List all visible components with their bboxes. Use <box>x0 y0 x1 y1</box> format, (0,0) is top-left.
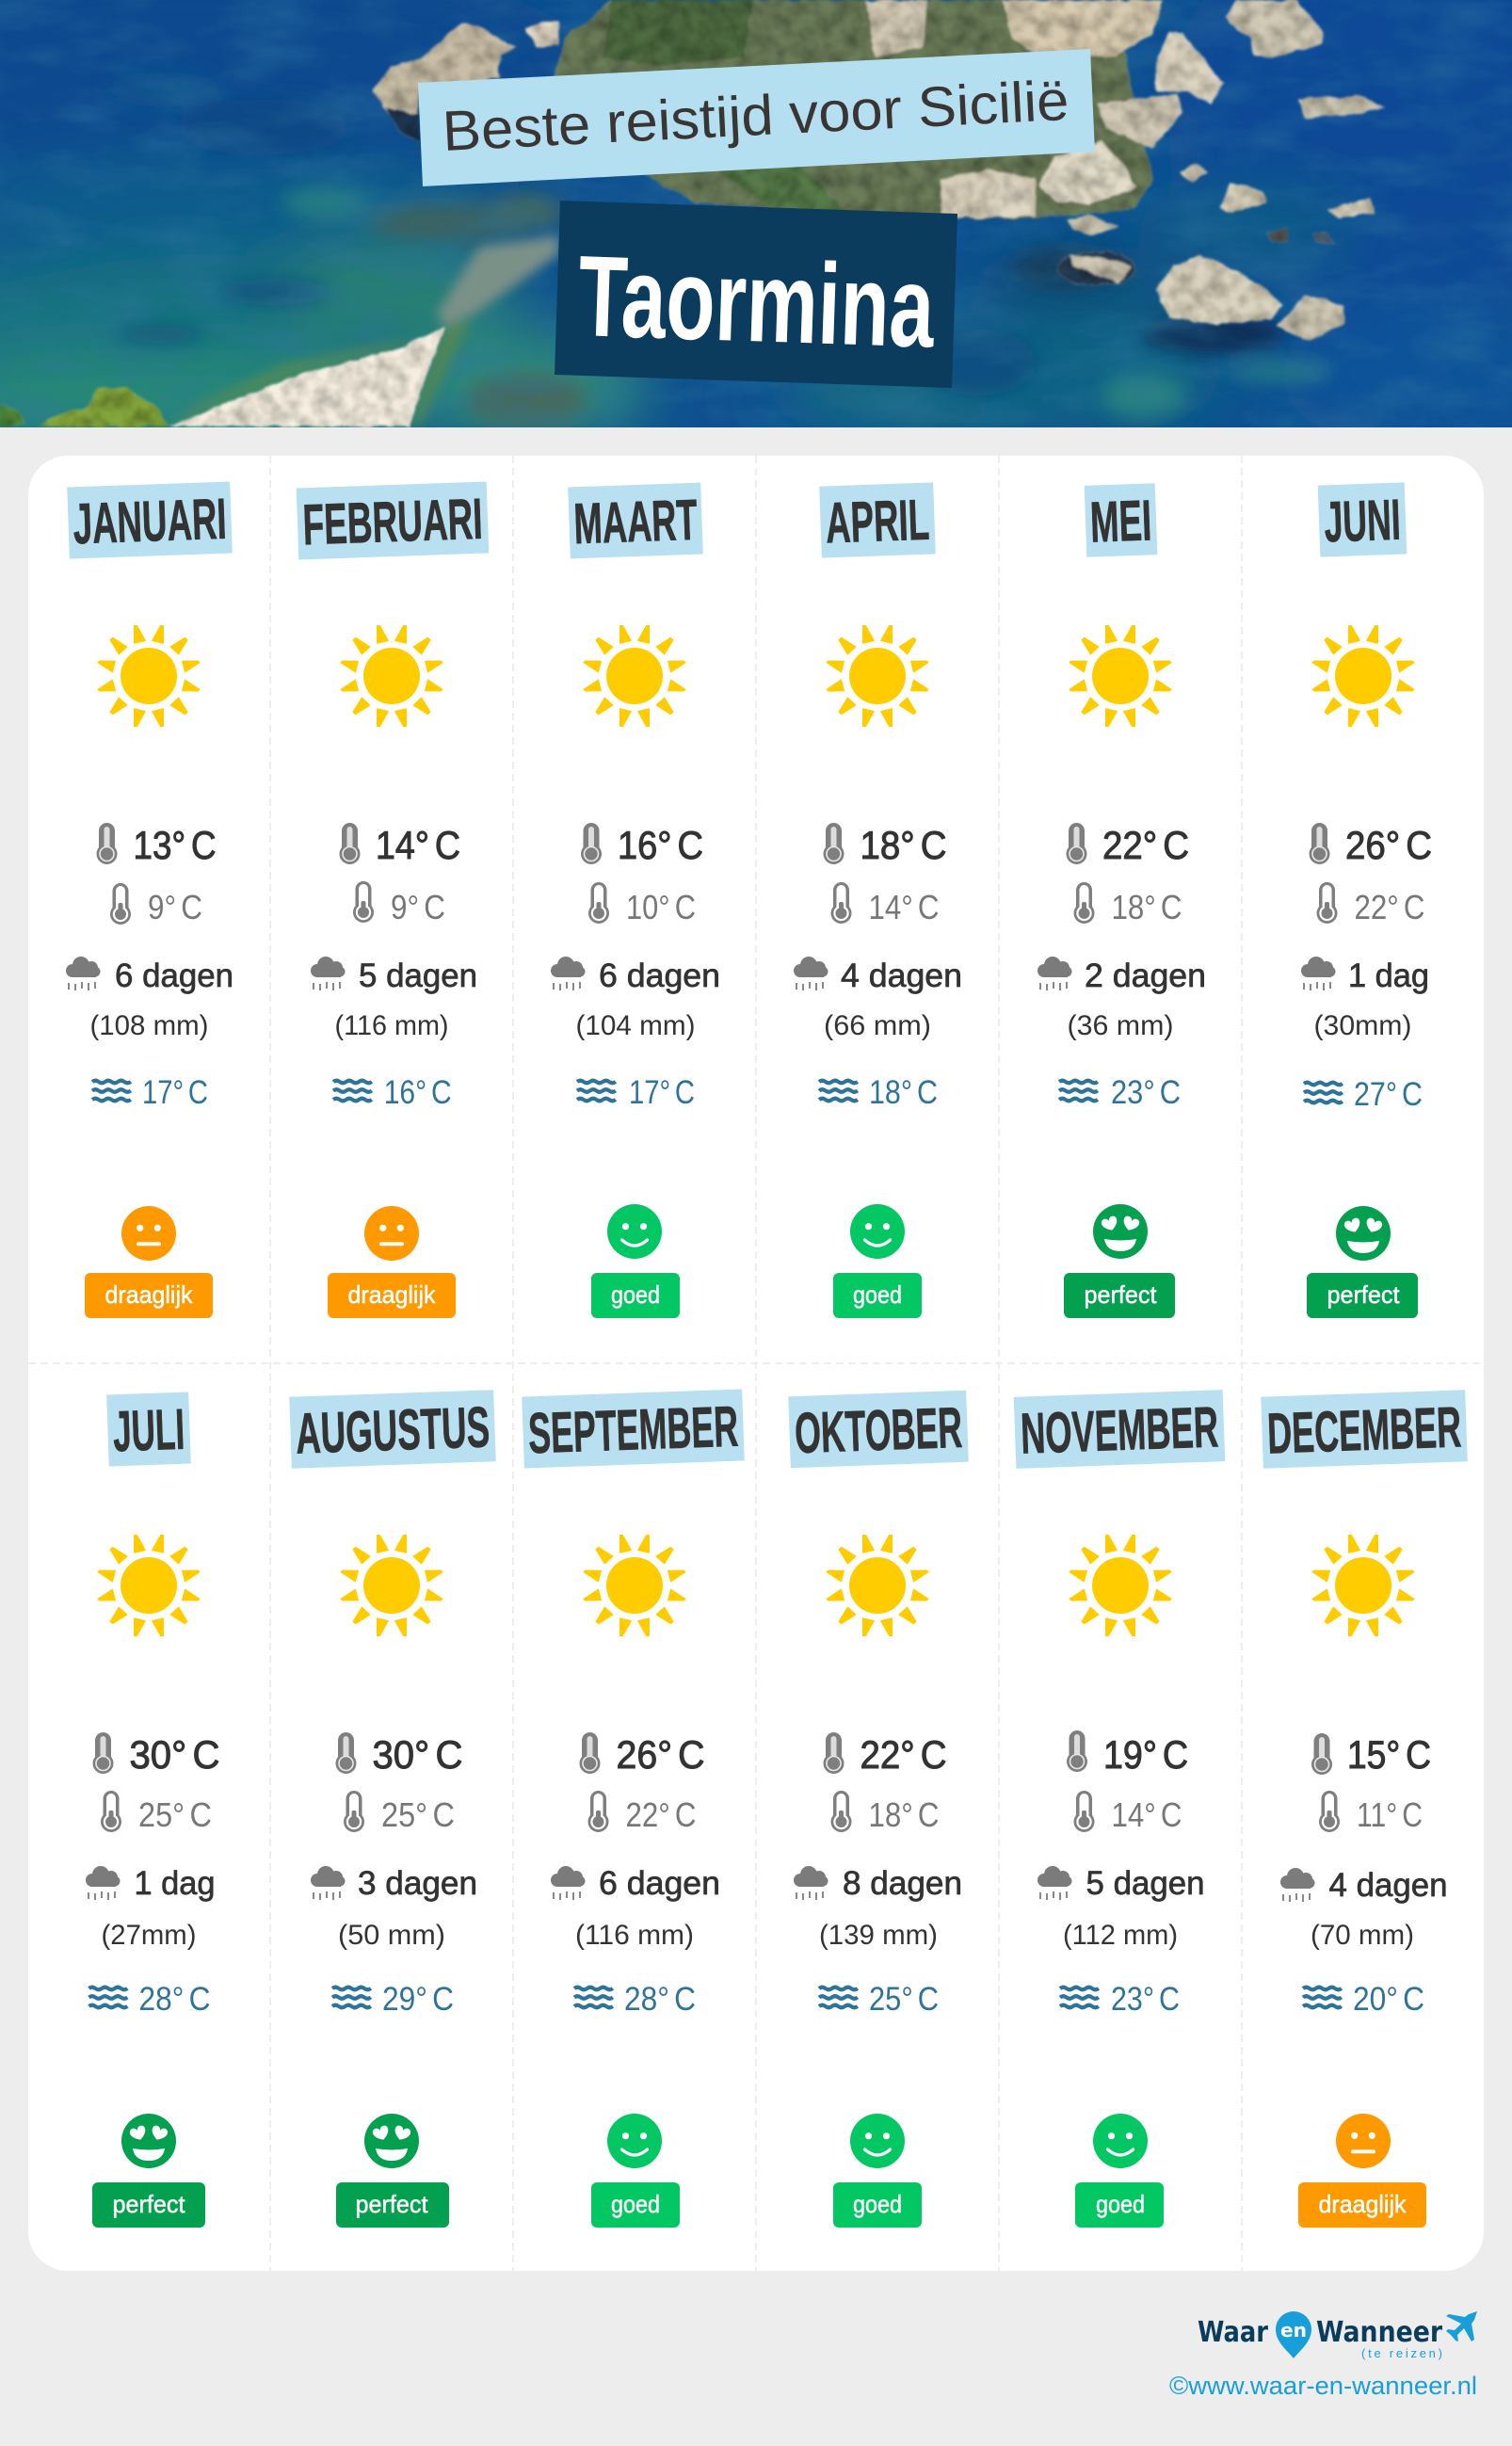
panel: mei <box>1037 483 1206 1318</box>
logo: Waar en Wanneer: (te reizen) <box>1361 2346 1442 2360</box>
high temperature <box>1066 823 1189 867</box>
low temperature <box>830 882 940 926</box>
icon: sun <box>827 1535 928 1636</box>
rainfall: (70 mm) <box>1311 1920 1414 1951</box>
rain days <box>1037 957 1206 994</box>
icon: smiling face <box>850 2114 905 2168</box>
icon: sun <box>98 625 200 727</box>
rainfall: (116 mm) <box>575 1920 694 1951</box>
month label <box>1014 1390 1225 1469</box>
rain days <box>86 1865 215 1902</box>
panel: augustus <box>289 1390 496 2228</box>
high temperature <box>1067 1730 1188 1777</box>
sea temperature: 18° C <box>869 1074 938 1111</box>
low temperature <box>1319 1791 1423 1834</box>
icon: sun <box>1070 1535 1171 1636</box>
rating badge <box>833 2182 922 2228</box>
rainfall: (112 mm) <box>1063 1920 1178 1951</box>
low temperature: 11° C <box>1357 1795 1423 1834</box>
month label: JUNI <box>1323 488 1402 554</box>
icon: sun <box>1312 625 1414 727</box>
high temperature <box>823 1732 947 1777</box>
rating badge: goed <box>611 1280 660 1309</box>
high temperature <box>1309 823 1432 867</box>
rainfall: (116 mm) <box>335 1010 448 1041</box>
rainfall: (66 mm) <box>824 1010 931 1041</box>
panel: april <box>794 482 962 1318</box>
sea temperature <box>1060 1981 1180 2018</box>
sea temperature: 17° C <box>142 1074 208 1111</box>
low temperature <box>1073 1791 1182 1834</box>
month label: APRIL <box>825 488 930 555</box>
rating badge: draaglijk <box>1318 2190 1407 2218</box>
trees <box>38 388 169 426</box>
sea temperature: 23° C <box>1111 1981 1180 2018</box>
month label <box>1318 482 1407 557</box>
icon: sun <box>341 1535 442 1636</box>
rainfall: (104 mm) <box>576 1010 695 1041</box>
beach <box>169 327 445 426</box>
logo: Waar en Wanneer: Waar <box>1198 2316 1268 2349</box>
island <box>555 0 1163 218</box>
sea temperature <box>1059 1074 1181 1111</box>
rain days: 3 dagen <box>358 1865 477 1902</box>
icon: smiling face <box>1093 2114 1148 2168</box>
high temperature <box>339 823 460 867</box>
rain days: 6 dagen <box>115 957 233 994</box>
icon: neutral face <box>1336 2114 1391 2168</box>
rating badge <box>336 2182 449 2228</box>
rain days: 6 dagen <box>599 957 720 994</box>
rain days: 5 dagen <box>1086 1865 1205 1902</box>
title label: Beste reistijd voor Sicilië: Beste reistijd voor Sicilië <box>441 69 1070 163</box>
month label: JANUARI <box>72 487 228 555</box>
month label <box>289 1390 496 1469</box>
sea temperature: 25° C <box>869 1981 939 2018</box>
rating badge: perfect <box>356 2190 428 2218</box>
high temperature: 30° C <box>130 1732 220 1777</box>
rating badge <box>1064 1273 1175 1318</box>
rating badge <box>1075 2182 1164 2228</box>
low temperature <box>588 882 696 926</box>
sea temperature: 28° C <box>624 1981 696 2018</box>
sea temperature: 16° C <box>384 1074 452 1111</box>
sea temperature <box>1304 1076 1423 1113</box>
logo: Waar en Wanneer <box>1198 2311 1477 2360</box>
rain days <box>551 957 720 994</box>
icon: neutral face <box>121 1206 176 1261</box>
rating badge: perfect <box>113 2190 185 2218</box>
sea temperature <box>1303 1981 1424 2018</box>
icon: map pin <box>1276 2311 1311 2358</box>
sea temperature: 20° C <box>1353 1981 1424 2018</box>
rating badge <box>1298 2182 1426 2228</box>
high temperature <box>580 1732 704 1777</box>
month label: NOVEMBER <box>1020 1394 1219 1466</box>
rating badge: goed <box>611 2190 660 2218</box>
title label: Beste reistijd voor Sicilië <box>418 49 1095 186</box>
high temperature: 19° C <box>1103 1732 1188 1777</box>
rain days <box>794 957 962 994</box>
high temperature <box>581 823 703 867</box>
rain days <box>66 957 233 994</box>
high temperature: 26° C <box>616 1732 704 1777</box>
month label <box>67 482 233 558</box>
month label: AUGUSTUS <box>295 1394 491 1466</box>
month label: MAART <box>572 488 699 555</box>
rating badge: draaglijk <box>348 1280 436 1309</box>
sea temperature: 27° C <box>1354 1076 1423 1113</box>
left rocks <box>372 24 517 120</box>
high temperature: 13° C <box>134 823 217 867</box>
icon: sun <box>1070 625 1171 727</box>
rating badge <box>833 1273 922 1318</box>
sea temperature: 17° C <box>629 1074 695 1111</box>
rainfall: (27mm) <box>102 1920 196 1951</box>
title: Taormina <box>555 201 957 388</box>
sea temperature: 23° C <box>1111 1074 1181 1111</box>
low temperature <box>344 1791 455 1834</box>
rating badge: draaglijk <box>105 1280 193 1309</box>
icon: heart-eyes face <box>364 2114 419 2168</box>
rating badge <box>92 2182 205 2228</box>
high temperature <box>823 823 947 867</box>
rain days: 4 dagen <box>841 957 962 994</box>
month label: OKTOBER <box>794 1395 963 1465</box>
panel: oktober <box>788 1391 969 2228</box>
high temperature: 22° C <box>861 1732 947 1777</box>
sandy spit <box>437 235 559 327</box>
rain days: 6 dagen <box>599 1865 720 1902</box>
month label: FEBRUARI <box>301 487 484 556</box>
panel: maart <box>551 483 720 1318</box>
month label: MEI <box>1089 488 1152 555</box>
low temperature <box>110 883 202 926</box>
icon: neutral face <box>364 1206 419 1261</box>
panel: monthly climate card <box>28 456 1484 2271</box>
sea temperature <box>92 1074 208 1111</box>
month label <box>106 1392 191 1466</box>
rating badge: goed <box>1096 2190 1145 2218</box>
rating badge: perfect <box>1327 1280 1400 1309</box>
icon: sun <box>341 625 442 727</box>
month label <box>568 483 703 558</box>
month label: JULI <box>112 1397 185 1463</box>
rainfall: (108 mm) <box>90 1010 209 1041</box>
sea temperature <box>574 1981 696 2018</box>
high temperature <box>1311 1732 1431 1777</box>
icon: smiling face <box>850 1204 905 1259</box>
sea temperature: 28° C <box>139 1981 211 2018</box>
icon: sun <box>827 625 928 727</box>
rain days <box>1301 957 1429 994</box>
rain days: 4 dagen <box>1329 1867 1448 1904</box>
rain days: 1 dag <box>134 1865 215 1902</box>
rainfall: (36 mm) <box>1068 1010 1173 1041</box>
icon: sun <box>584 1535 685 1636</box>
low temperature: 22° C <box>625 1795 697 1834</box>
panel: november <box>1014 1390 1225 2228</box>
rainfall: (139 mm) <box>819 1920 938 1951</box>
low temperature: 22° C <box>1354 888 1425 926</box>
rainfall: (50 mm) <box>338 1920 445 1951</box>
high temperature: 14° C <box>376 823 460 867</box>
low temperature <box>1316 882 1425 926</box>
high temperature: 26° C <box>1345 823 1432 867</box>
source url: ©www.waar-en-wanneer.nl <box>1169 2372 1477 2400</box>
low temperature <box>830 1791 940 1834</box>
rating badge <box>1307 1273 1418 1318</box>
low temperature: 18° C <box>868 1795 940 1834</box>
low temperature <box>353 881 445 926</box>
icon: heart-eyes face <box>121 2114 176 2168</box>
low temperature: 10° C <box>626 888 696 926</box>
rain days <box>311 957 477 994</box>
sea temperature <box>819 1074 938 1111</box>
low temperature: 14° C <box>868 888 940 926</box>
rainfall: (30mm) <box>1314 1010 1412 1041</box>
month label <box>297 481 489 560</box>
low temperature: 25° C <box>381 1795 455 1834</box>
panel: september <box>522 1389 745 2228</box>
low temperature <box>1073 882 1182 926</box>
low temperature: 14° C <box>1111 1795 1182 1834</box>
high temperature <box>92 1732 220 1777</box>
sea temperature <box>819 1981 939 2018</box>
panel: juli <box>86 1392 220 2228</box>
rating badge <box>85 1273 213 1318</box>
high temperature: 30° C <box>373 1732 463 1777</box>
title: Taormina: Taormina <box>576 232 937 372</box>
high temperature <box>335 1732 463 1777</box>
high temperature: 16° C <box>618 823 703 867</box>
sea temperature <box>577 1074 695 1111</box>
high temperature: 22° C <box>1102 823 1189 867</box>
sea temperature: 29° C <box>382 1981 454 2018</box>
low temperature: 9° C <box>148 888 202 926</box>
icon: heart-eyes face <box>1093 1204 1148 1259</box>
icon: sun <box>98 1535 200 1636</box>
icon: sun <box>1312 1535 1414 1636</box>
icon: smiling face <box>607 1204 662 1259</box>
icon: sun <box>584 625 685 727</box>
logo: Waar en Wanneer: en <box>1280 2319 1307 2341</box>
right rocks <box>1225 0 1323 58</box>
rain days: 1 dag <box>1348 957 1429 994</box>
logo: Waar en Wanneer: Wanneer <box>1316 2316 1442 2349</box>
low temperature: 9° C <box>391 888 445 926</box>
sea temperature <box>88 1981 211 2018</box>
low temperature: 18° C <box>1111 888 1182 926</box>
rating badge: perfect <box>1085 1280 1157 1309</box>
high temperature <box>96 823 217 867</box>
rating badge <box>591 2182 680 2228</box>
month label <box>522 1389 745 1469</box>
icon: smiling face <box>607 2114 662 2168</box>
high temperature: 18° C <box>861 823 947 867</box>
panel: juni <box>1301 482 1432 1318</box>
panel: februari <box>297 481 489 1318</box>
low temperature <box>587 1791 697 1834</box>
icon: airplane <box>1446 2311 1477 2341</box>
low temperature: 25° C <box>138 1795 212 1834</box>
panel: december <box>1261 1390 1468 2228</box>
month label <box>819 482 936 558</box>
month label: SEPTEMBER <box>527 1394 739 1465</box>
rain days: 2 dagen <box>1085 957 1206 994</box>
rating badge: goed <box>853 1280 902 1309</box>
month label <box>1085 483 1157 557</box>
rating badge <box>328 1273 456 1318</box>
high temperature: 15° C <box>1347 1732 1431 1777</box>
banner photo: coastline <box>0 0 1512 461</box>
sea temperature <box>332 1981 454 2018</box>
sea temperature <box>333 1074 452 1111</box>
icon: heart-eyes face <box>1336 1206 1391 1261</box>
rain days: 8 dagen <box>843 1865 962 1902</box>
rating badge <box>591 1273 680 1318</box>
rain days: 5 dagen <box>359 957 477 994</box>
panel: januari <box>66 482 233 1318</box>
low temperature <box>101 1791 212 1834</box>
rating badge: goed <box>853 2190 902 2218</box>
month label <box>788 1391 969 1468</box>
